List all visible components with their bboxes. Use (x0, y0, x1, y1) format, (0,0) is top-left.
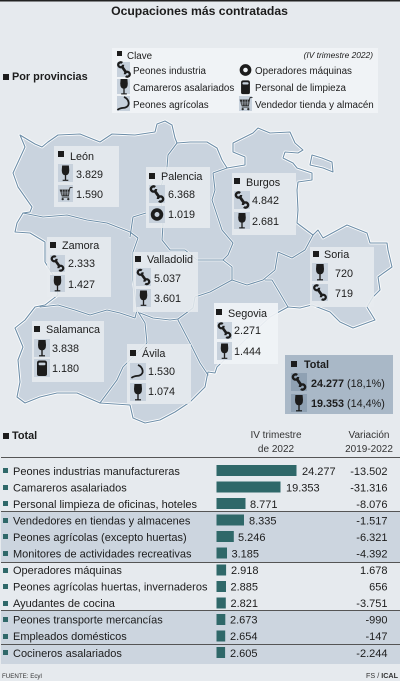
row: Personal limpieza: 8.771 (250, 499, 278, 511)
card: regional total: Total (304, 359, 329, 371)
row: Empleados: -147 (365, 631, 388, 643)
card: regional total (285, 355, 393, 414)
card: Zamora: 2.333 (68, 258, 95, 270)
row: Ayudantes (3, 598, 388, 610)
row: Peones transporte: Peones transporte mercancías (13, 614, 163, 626)
map: Castilla y Leon (13, 121, 392, 423)
row: Empleados (3, 630, 388, 643)
row: Peones industrias: -13.502 (350, 466, 388, 478)
row: Operadores: 2.918 (231, 565, 259, 577)
row: Peones transporte: -990 (365, 614, 388, 626)
row: Operadores: 1.678 (360, 565, 388, 577)
legend item: limpieza (241, 80, 346, 94)
row: Vendedores: 8.335 (249, 516, 277, 528)
row: Monitores: Monitores de actividades recreativas (13, 548, 192, 560)
card: Burgos: Burgos (246, 177, 281, 189)
column header: quarter: de 2022 (258, 444, 295, 455)
card: Ávila: 1.074 (148, 386, 175, 398)
row: Peones agricolas: -6.321 (356, 532, 388, 544)
card: Segovia: 2.271 (234, 325, 261, 337)
row: Peones huertas: 2.885 (230, 582, 258, 594)
row: Cocineros (3, 647, 388, 660)
legend item: camareros: Camareros asalariados (133, 83, 234, 94)
card: Palencia: 6.368 (168, 189, 195, 201)
legend item: peones agricolas: Peones agrícolas (133, 100, 209, 111)
row: Personal limpieza (3, 498, 388, 511)
row: Vendedores: Vendedores en tiendas y almacenes (13, 516, 191, 528)
card: Segovia: Segovia (228, 308, 267, 320)
panel: legend: Clave (127, 51, 153, 62)
card: Burgos: 4.842 (252, 195, 279, 207)
row: Peones transporte (3, 614, 388, 626)
row: Monitores: 3.185 (232, 548, 259, 560)
card: Soria: 719 (335, 288, 353, 300)
card: Valladolid: Valladolid (147, 254, 193, 266)
card: León: 3.829 (76, 169, 103, 181)
row: Peones transporte: 2.673 (230, 614, 258, 626)
card: León: León (70, 151, 94, 163)
legend item: peones industria: Peones industria (133, 66, 207, 77)
row: Ayudantes: -3.751 (356, 598, 388, 610)
legend item: peones industria (117, 62, 207, 77)
legend item: peones agricolas (117, 96, 209, 111)
row: Camareros: 19.353 (286, 482, 320, 494)
card: Ávila (127, 344, 191, 404)
card: Soria (310, 247, 374, 307)
row: Peones huertas (3, 581, 388, 594)
row: Vendedores (3, 514, 388, 528)
legend item: limpieza: Personal de limpieza (255, 83, 346, 94)
card: Segovia (214, 303, 278, 364)
card: Ávila: 1.530 (148, 366, 175, 378)
card: Burgos (232, 173, 296, 235)
card: Zamora (47, 237, 111, 297)
top rule (0, 0, 400, 2)
row: Ayudantes: Ayudantes de cocina (13, 598, 116, 610)
row: Peones huertas: Peones agrícolas huertas, invernaderos (13, 582, 208, 594)
panel: legend (112, 48, 378, 113)
card: Salamanca: 1.180 (52, 363, 79, 375)
card: Valladolid: 3.601 (154, 293, 181, 305)
row: Peones industrias: 24.277 (302, 466, 336, 478)
legend item: vendedor (239, 96, 374, 111)
heading: por provincias: Por provincias (12, 71, 88, 83)
heading: total: Total (12, 430, 37, 442)
card: Salamanca: Salamanca (46, 324, 100, 336)
card: Zamora: Zamora (62, 240, 99, 252)
card: Salamanca (32, 321, 104, 382)
table bands (1, 511, 400, 664)
row: Personal limpieza: -8.076 (356, 499, 388, 511)
row: Camareros: Camareros asalariados (13, 482, 127, 494)
row: Peones agricolas (3, 531, 388, 544)
row: Peones industrias (3, 465, 388, 478)
row: Cocineros: Cocineros asalariados (13, 648, 122, 660)
legend item: vendedor: Vendedor tienda y almacén (255, 100, 374, 111)
row: Vendedores: -1.517 (356, 516, 388, 528)
row: Peones agricolas: Peones agrícolas (excepto huertas) (13, 532, 187, 544)
card: Segovia: 1.444 (234, 346, 261, 358)
card: Soria: Soria (324, 249, 349, 261)
card: Zamora: 1.427 (68, 279, 95, 291)
card: Valladolid: 5.037 (154, 273, 181, 285)
card: León (54, 146, 119, 207)
row: Personal limpieza: Personal limpieza de oficinas, hoteles (13, 499, 198, 511)
row: Peones agricolas: 5.246 (238, 532, 266, 544)
row: Operadores (3, 564, 388, 577)
column header: variation: Variación (349, 430, 389, 441)
row: Operadores: Operadores máquinas (13, 565, 122, 577)
card: Palencia: 1.019 (168, 209, 195, 221)
row: Empleados: 2.654 (230, 631, 258, 643)
row: Cocineros: 2.605 (230, 648, 258, 660)
column header: variation: 2019-2022 (345, 444, 393, 455)
row: Camareros: -31.316 (350, 482, 388, 494)
card: regional total: 24.277 (18,1%) (311, 378, 385, 390)
credit: FS / ICAL (366, 671, 399, 680)
card: Valladolid (133, 252, 198, 312)
row: Peones huertas: 656 (369, 582, 388, 594)
row: Monitores (3, 548, 388, 560)
card: Palencia (146, 167, 210, 228)
row: Peones industrias: Peones industrias manufactureras (13, 466, 180, 478)
table: occupations (3, 465, 388, 660)
column header: quarter: IV trimestre (250, 430, 302, 441)
legend item: camareros (117, 79, 234, 94)
card: Burgos: 2.681 (252, 216, 279, 228)
legend item: operadores: Operadores máquinas (255, 66, 352, 77)
card: regional total: 19.353 (14,4%) (311, 398, 385, 410)
title: Ocupaciones más contratadas (111, 4, 288, 18)
row: Monitores: -4.392 (356, 548, 388, 560)
table rules (1, 457, 400, 645)
card: León: 1.590 (76, 189, 103, 201)
row: Ayudantes: 2.821 (230, 598, 258, 610)
card: Soria: 720 (335, 268, 353, 280)
card: Palencia: Palencia (161, 171, 202, 183)
row: Empleados: Empleados domésticos (13, 631, 127, 643)
row: Camareros (3, 482, 388, 494)
panel: legend: (IV trimestre 2022) (304, 50, 373, 60)
card: Ávila: Ávila (142, 347, 165, 360)
row: Cocineros: -2.244 (356, 648, 388, 660)
card: Salamanca: 3.838 (52, 343, 79, 355)
source: FUENTE: Ecyl (2, 673, 42, 680)
